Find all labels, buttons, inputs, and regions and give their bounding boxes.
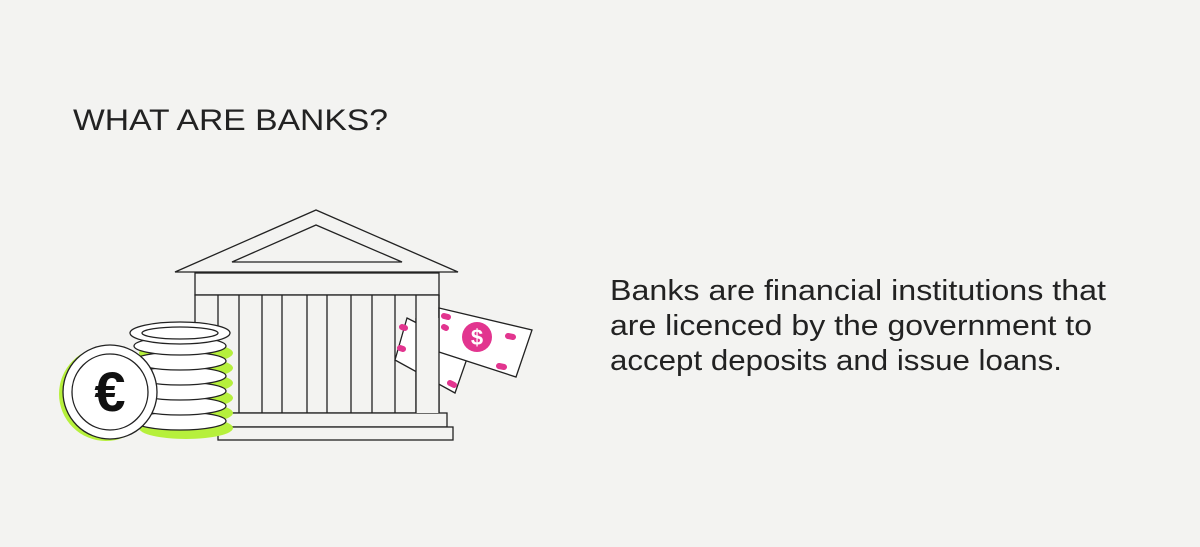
- icon: euro coin: [59, 345, 157, 441]
- icon: coin stack: [130, 322, 233, 439]
- description text: accept deposits and issue loans.: [610, 345, 1062, 377]
- icon: euro coin: €: [94, 360, 126, 423]
- description text: Banks are financial institutions that: [610, 275, 1106, 307]
- icon: dollar bills: [395, 295, 532, 413]
- title: WHAT ARE BANKS?: [73, 104, 388, 137]
- description text: are licenced by the government to: [610, 310, 1092, 342]
- illustration: bank with money: [59, 210, 532, 441]
- description text: [610, 275, 1106, 377]
- icon: dollar bills: $: [471, 325, 483, 350]
- icon: bank building: [175, 210, 458, 440]
